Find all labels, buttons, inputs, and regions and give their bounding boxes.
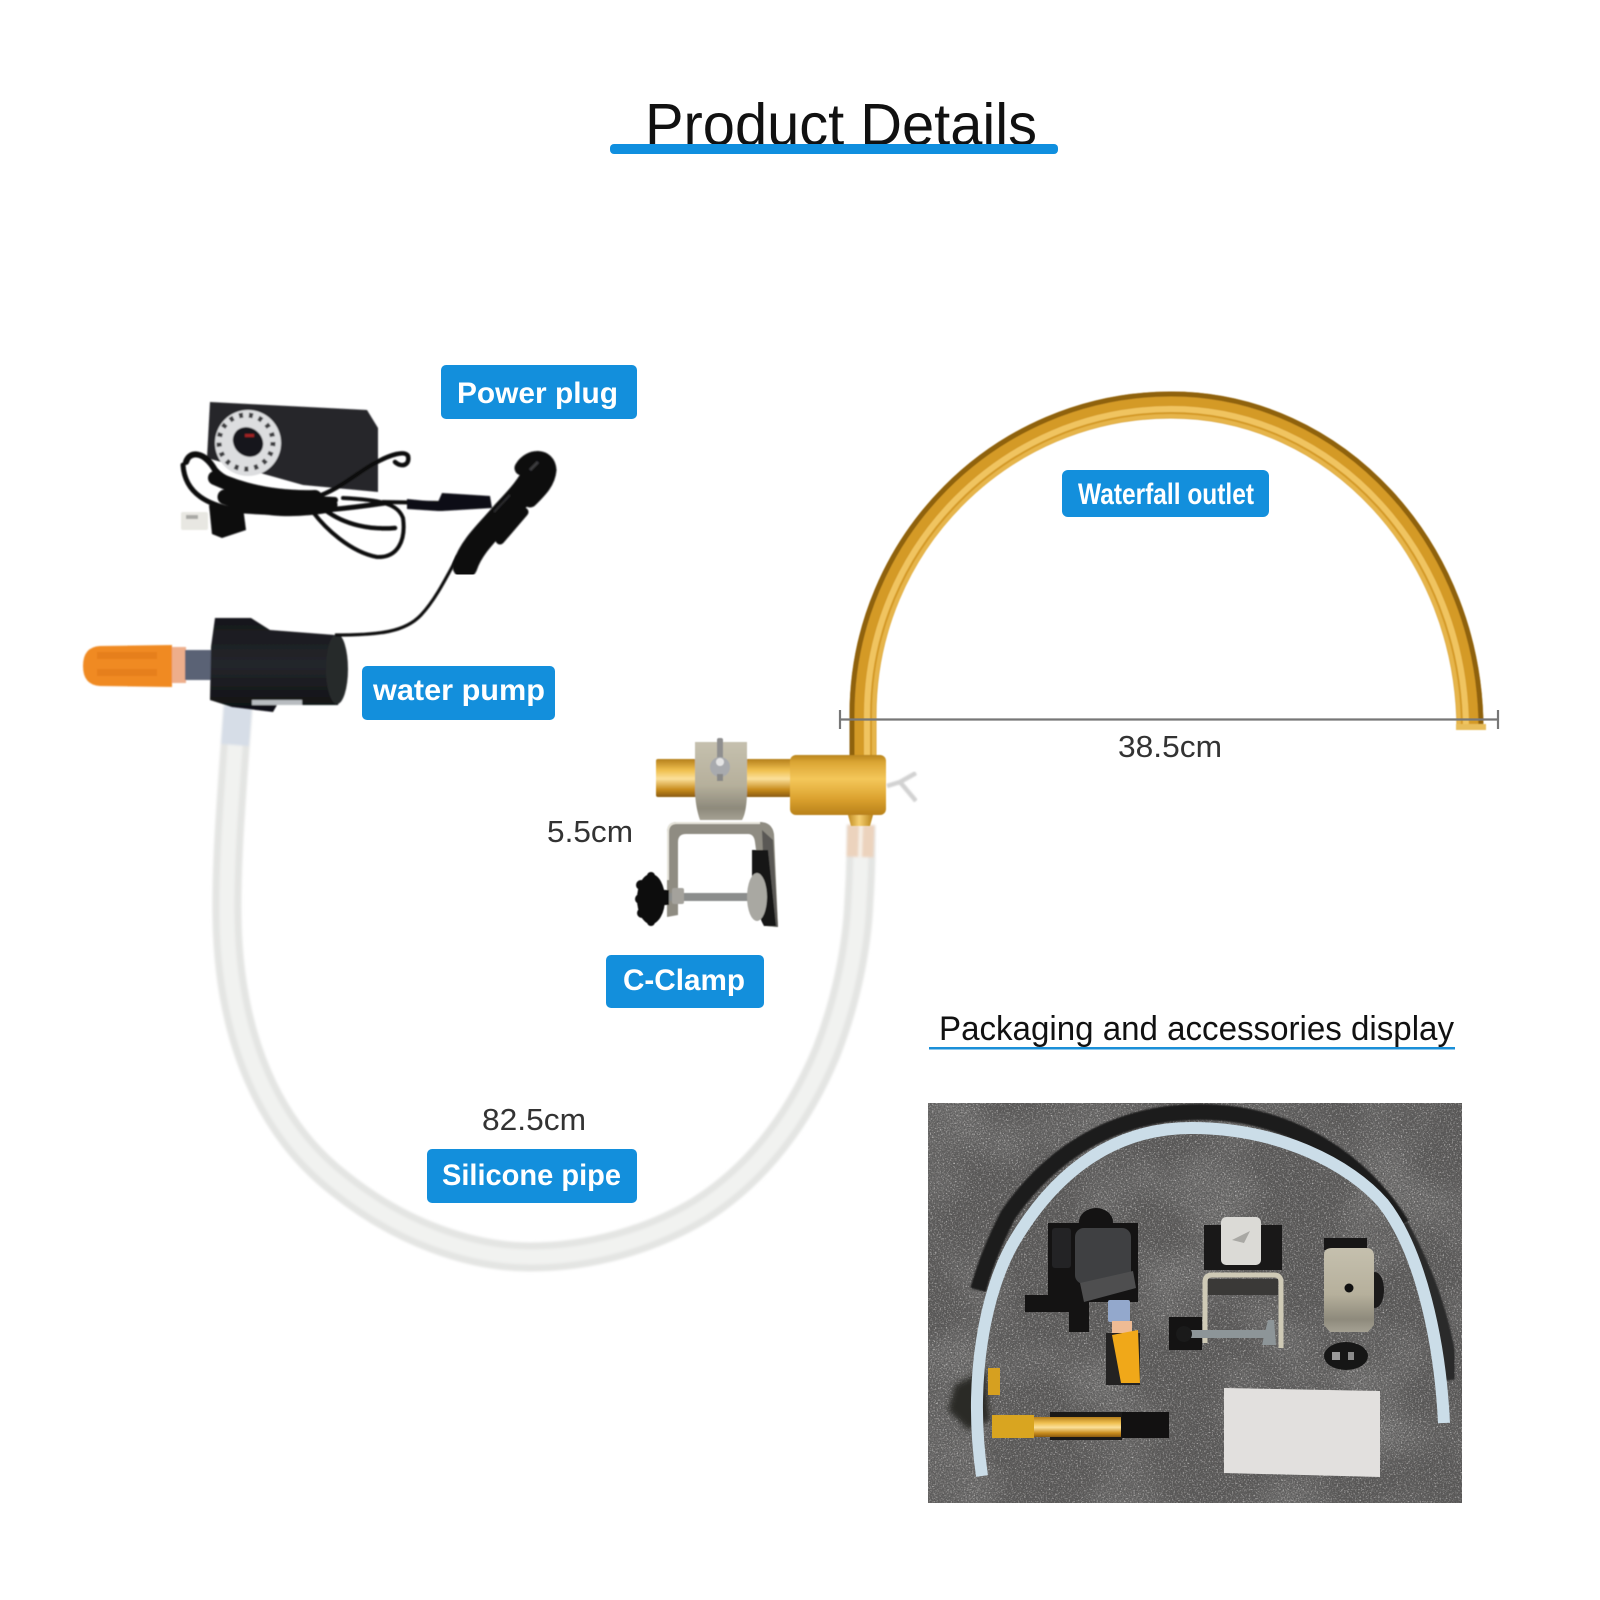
clamp frame [667, 822, 778, 927]
dimension: pipe length: 82.5cm [482, 1102, 586, 1137]
label: water pump: water pump [372, 674, 545, 707]
label: water pump [362, 666, 555, 720]
pump cable [335, 556, 458, 635]
packaging heading: Packaging and accessories display [939, 1010, 1454, 1048]
dimension: clamp opening: 5.5cm [547, 814, 633, 849]
label: power plug: Power plug [457, 377, 618, 410]
label: silicone pipe [427, 1149, 637, 1203]
plug [181, 512, 208, 530]
clamp frame in photo [1205, 1275, 1281, 1348]
pump body [210, 618, 342, 712]
dimension: arch width: 38.5cm [1118, 729, 1222, 764]
rubber pad [752, 850, 776, 926]
intake tube [172, 647, 186, 683]
title: Product Details [645, 92, 1037, 158]
label: waterfall outlet [1062, 470, 1269, 517]
waterfall outlet arch [852, 394, 1486, 760]
knob [635, 872, 669, 926]
silicone tube in photo [977, 1128, 1444, 1476]
gold block [790, 755, 886, 815]
label: waterfall outlet: Waterfall outlet [1078, 478, 1254, 511]
silicone pipe [227, 706, 861, 1257]
lower loop [313, 498, 404, 557]
packaging photo [928, 1103, 1462, 1503]
barrel connector [407, 493, 492, 511]
bracket in photo [1324, 1238, 1367, 1250]
filter in photo [1106, 1333, 1140, 1385]
foam notch [948, 1370, 990, 1430]
steel bracket [695, 742, 747, 820]
gold part in photo [1121, 1412, 1169, 1438]
C-clamp assembly [635, 738, 916, 927]
nozzle [848, 815, 873, 826]
foam background [928, 1103, 1462, 1503]
wing bolt [887, 773, 916, 801]
label: silicone pipe: Silicone pipe [442, 1159, 621, 1192]
adapter box [207, 402, 378, 492]
clamp pocket [1204, 1225, 1282, 1270]
cable coil [465, 458, 549, 566]
clamp block [1221, 1217, 1261, 1265]
dial [215, 410, 281, 476]
label: C-clamp [606, 955, 764, 1008]
arch groove [978, 1112, 1402, 1290]
cable bundle [186, 454, 335, 500]
pump pocket [1025, 1223, 1138, 1332]
screw rod [668, 893, 758, 901]
wing nut [717, 738, 723, 762]
label: C-clamp: C-Clamp [623, 964, 745, 997]
pump in photo [1075, 1228, 1131, 1284]
label: power plug [441, 365, 637, 419]
width dimension line [840, 710, 1498, 729]
water pump [83, 556, 458, 712]
white card [1224, 1388, 1380, 1477]
power adapter [181, 402, 549, 566]
clamp screw [1191, 1330, 1266, 1338]
power cables [183, 453, 440, 557]
orange filter [83, 645, 172, 687]
upper wire [313, 453, 408, 498]
gold tube [656, 759, 792, 797]
